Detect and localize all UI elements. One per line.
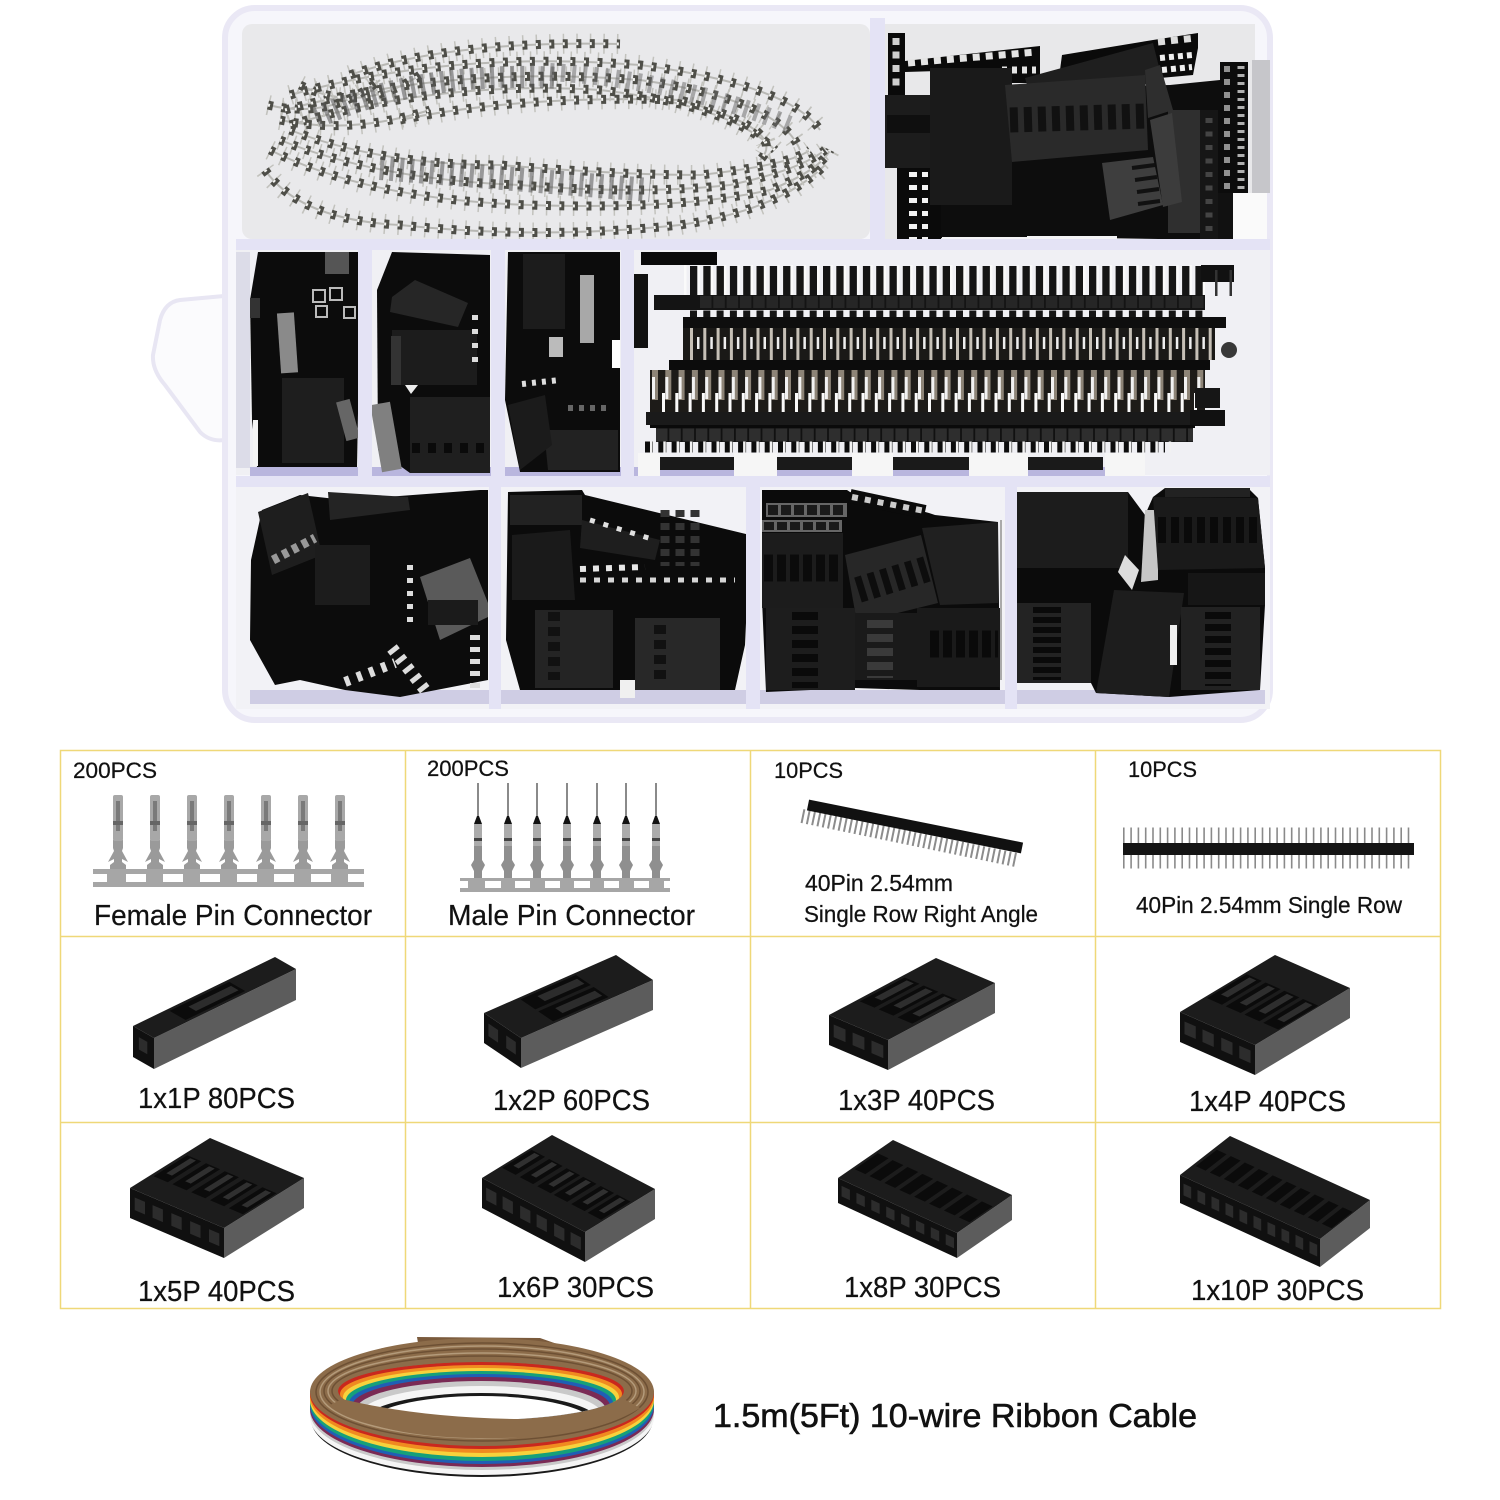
header pin rows xyxy=(634,252,1237,476)
compartment floor shading xyxy=(236,24,1270,709)
cell: 1x8P xyxy=(838,1140,1012,1304)
cell: male pin connector xyxy=(427,756,695,932)
cell: 1x2P xyxy=(484,955,653,1117)
black housings, bottom compartment 2 xyxy=(506,490,750,698)
icon: 1x5P housing xyxy=(130,1138,304,1258)
cell: 1x10P: 1x10P 30PCS xyxy=(1191,1275,1364,1307)
dark base of compartment xyxy=(897,80,1222,243)
icon: 1x6P housing xyxy=(482,1135,655,1262)
panel: product photo of storage box xyxy=(153,8,1270,720)
right vertical socket strips xyxy=(1200,62,1248,240)
row 4 bars xyxy=(646,410,1225,442)
icon: right angle pin header xyxy=(802,805,1022,860)
cell: 1x5P xyxy=(130,1138,304,1308)
cell: 1x3P xyxy=(829,958,995,1117)
cell: male pin connector: Male Pin Connector xyxy=(448,900,695,932)
icon: 1x2P housing xyxy=(484,955,653,1068)
socket strips, upper left xyxy=(888,33,1040,95)
ribbon cable caption: 1.5m(5Ft) 10-wire Ribbon Cable xyxy=(713,1397,1197,1434)
cell: right angle header: 10PCS xyxy=(774,758,843,783)
cell: female pin connector: Female Pin Connector xyxy=(94,900,372,932)
cell: 1x8P: 1x8P 30PCS xyxy=(844,1272,1001,1304)
icon: 1x10P housing xyxy=(1180,1136,1370,1267)
black housings, bottom compartment 3 xyxy=(762,490,1001,692)
cell: straight header: 10PCS xyxy=(1128,757,1197,782)
cell: 1x5P: 1x5P 40PCS xyxy=(138,1276,295,1308)
table: parts grid xyxy=(60,750,1441,1309)
cell: 1x10P xyxy=(1180,1136,1370,1307)
cell: 1x4P: 1x4P 40PCS xyxy=(1189,1086,1346,1118)
cell: straight header: 40Pin 2.54mm Single Row xyxy=(1136,892,1402,918)
cell: 1x3P: 1x3P 40PCS xyxy=(838,1085,995,1117)
cell: straight header xyxy=(1123,757,1414,918)
icon: 1x4P housing xyxy=(1180,955,1350,1075)
black housings, middle compartment 1 xyxy=(250,252,361,467)
box outer shell xyxy=(225,8,1270,720)
icon: female pin strip xyxy=(93,795,364,887)
row 4 pins xyxy=(645,442,1175,452)
cell: 1x2P: 1x2P 60PCS xyxy=(493,1085,650,1117)
cell: 1x1P: 1x1P 80PCS xyxy=(138,1083,295,1115)
box handle xyxy=(153,296,224,440)
icon: rainbow ribbon cable coil xyxy=(310,1337,654,1477)
icon: male pin strip xyxy=(460,783,670,892)
cell: male pin connector: 200PCS xyxy=(427,756,509,781)
cell: female pin connector xyxy=(73,758,372,932)
black housings, top right compartment xyxy=(885,33,1248,243)
cell: right angle header: Single Row Right Angle xyxy=(804,901,1038,927)
icon: 1x8P housing xyxy=(838,1140,1012,1258)
row 2 xyxy=(683,317,1237,360)
black housings, bottom compartment 1 xyxy=(250,490,488,697)
metal pin chain coil xyxy=(265,44,830,232)
cell: 1x4P xyxy=(1180,955,1350,1118)
row 1 pins xyxy=(675,265,1234,283)
box dividers xyxy=(236,18,1270,709)
black housings, bottom compartment 4 xyxy=(1017,488,1265,697)
lower left socket strip xyxy=(897,168,941,243)
cell: 1x6P: 1x6P 30PCS xyxy=(497,1272,654,1304)
black housings, middle compartment 3 xyxy=(505,252,620,472)
icon: straight pin header xyxy=(1123,843,1414,855)
cell: 1x1P xyxy=(133,957,296,1115)
socket strips, top right xyxy=(1060,33,1198,78)
cell: 1x6P xyxy=(482,1135,655,1304)
row 1 bar xyxy=(654,295,1205,310)
cell: right angle header: 40Pin 2.54mm xyxy=(805,870,953,896)
icon: 1x1P housing xyxy=(133,957,296,1069)
cell: right angle header xyxy=(774,758,1038,927)
icon: 1x3P housing xyxy=(829,958,995,1070)
black housings, middle compartment 2 xyxy=(370,252,490,473)
cell: female pin connector: 200PCS xyxy=(73,758,157,783)
white tray ribs xyxy=(942,236,1117,241)
tray rail and white tabs xyxy=(638,453,1145,476)
row 3 xyxy=(650,360,1220,412)
